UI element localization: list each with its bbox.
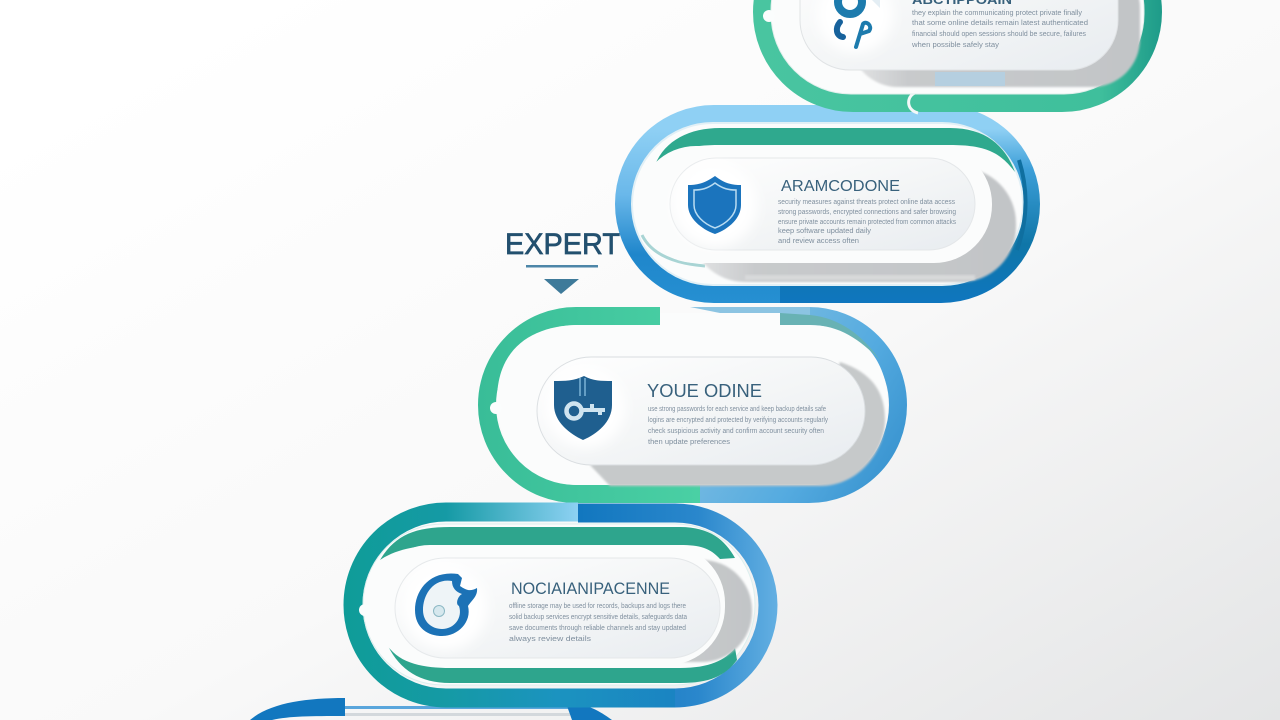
icon: shield	[688, 176, 741, 234]
pill 1: top step	[762, 0, 1153, 113]
body text: save documents through reliable channels and stay updated	[509, 625, 686, 632]
body text: offline storage may be used for records, backups and logs there	[509, 603, 686, 610]
body text: strong passwords, encrypted connections and safer browsing	[778, 209, 956, 216]
pill 3: online step	[487, 307, 898, 494]
body text: always review details	[509, 636, 592, 643]
outer ring	[353, 512, 768, 698]
body text: when possible safely stay	[911, 42, 1000, 49]
heading: YOUE ODINE	[647, 381, 762, 401]
body text	[648, 406, 828, 446]
body text: and review access often	[778, 238, 859, 245]
body text: financial should open sessions should be secure, failures	[912, 31, 1086, 38]
pill 4: personal step	[353, 512, 768, 698]
outer ring	[762, 0, 1153, 103]
heading: NOCIAIANIPACENNE	[511, 579, 670, 598]
body text	[911, 10, 1088, 49]
heading: ARAMCODONE	[781, 178, 900, 195]
body text	[509, 603, 687, 643]
connector dot	[359, 604, 371, 616]
green inner arcs	[380, 527, 735, 560]
connector dot	[763, 10, 775, 22]
body text: security measures against threats protect online data access	[778, 199, 955, 206]
pill 5: partial bottom step	[250, 698, 612, 720]
card	[372, 545, 725, 665]
body text	[778, 199, 956, 245]
outer ring	[487, 316, 898, 494]
body text: they explain the communicating protect private finally	[912, 10, 1083, 17]
body text: check suspicious activity and confirm account security often	[648, 428, 824, 435]
body text: then update preferences	[648, 439, 731, 446]
green inner arc	[655, 128, 1015, 172]
ring notch	[909, 92, 918, 113]
icon: shield with key	[554, 376, 612, 440]
icon: key and letter	[837, 0, 880, 47]
arc	[250, 698, 345, 720]
heading: EXPERT	[505, 228, 620, 294]
body text: ensure private accounts remain protected from common attacks	[778, 219, 956, 226]
body text: keep software updated daily	[778, 228, 872, 235]
body text: use strong passwords for each service and keep backup details safe	[648, 406, 826, 413]
arrow	[544, 279, 579, 294]
card	[537, 357, 865, 465]
pill 2: armor step	[624, 114, 1031, 294]
card	[638, 146, 992, 263]
heading: EXPERT: EXPERT	[505, 228, 620, 261]
icon: abstract lock	[415, 573, 477, 636]
card	[800, 0, 1118, 70]
outer ring	[624, 114, 1031, 294]
connector dot	[490, 402, 502, 414]
body text: that some online details remain latest authenticated	[912, 20, 1088, 27]
body text: logins are encrypted and protected by verifying accounts regularly	[648, 417, 828, 424]
body text: solid backup services encrypt sensitive details, safeguards data	[509, 614, 687, 621]
